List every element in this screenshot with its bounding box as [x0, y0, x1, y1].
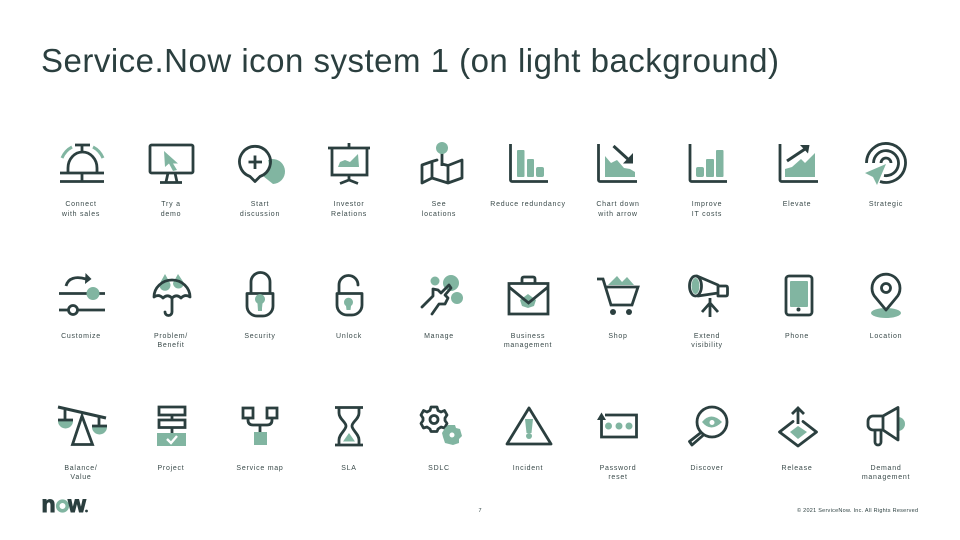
icon: password field: [597, 412, 636, 437]
icon: service map: [243, 408, 277, 445]
icon: megaphone: [868, 408, 905, 445]
icon: open padlock: [337, 276, 362, 315]
icon: telescope: [690, 276, 728, 317]
logo: now: w: [67, 491, 86, 517]
icon: hourglass: [335, 408, 363, 445]
label: Incident: Incident: [513, 465, 543, 472]
page number: 7: [478, 508, 482, 514]
icon: discussion bubbles: [239, 146, 285, 184]
label: Chart down with arrow: Chart down: [596, 201, 640, 208]
label: Release: Release: [782, 465, 812, 472]
label: Discover: Discover: [690, 465, 724, 472]
icon: service bell: [60, 145, 104, 182]
icon: project flow: [157, 407, 186, 446]
label: Shop: Shop: [608, 333, 628, 340]
icon: hand with circles: [422, 275, 463, 314]
icon: bars descending: [510, 144, 548, 182]
logo: now: [42, 491, 88, 517]
label: Connect with sales: with sales: [61, 211, 100, 218]
icon: balance scale: [58, 407, 107, 444]
label: Location: Location: [870, 333, 902, 340]
label: SDLC: SDLC: [428, 465, 450, 472]
icon: gears: [421, 407, 462, 445]
label: Reduce redundancy: Reduce redundancy: [490, 201, 566, 208]
icon: bars ascending: [690, 144, 727, 182]
label: Connect with sales: Connect: [65, 201, 97, 208]
label: Phone: Phone: [785, 333, 809, 340]
label: Service map: Service map: [236, 465, 284, 472]
label: Security: Security: [244, 333, 276, 340]
icon: target with arrow: [865, 143, 906, 185]
icon: umbrella: [154, 274, 190, 316]
icon: briefcase: [509, 277, 548, 314]
label: Start discussion: discussion: [240, 211, 280, 218]
label: Problem/Benefit: Benefit: [157, 342, 185, 349]
icon: warning triangle: [507, 408, 551, 444]
icon: phone: [786, 276, 812, 315]
label: Extend visibility: Extend: [694, 333, 720, 340]
copyright: © 2021 ServiceNow. Inc. All Rights Reserved: [797, 507, 918, 514]
label: Investor Relations: Relations: [331, 211, 367, 218]
label: Try a demo: demo: [161, 211, 181, 218]
label: Extend visibility: visibility: [691, 342, 723, 349]
icon: presentation board: [328, 143, 370, 184]
icon: area chart with up arrow: [780, 144, 818, 182]
icon: locked padlock: [247, 272, 273, 316]
label: SLA: SLA: [341, 465, 357, 472]
label: See locations: locations: [422, 211, 456, 218]
label: Demand management: Demand: [871, 465, 901, 472]
label: Strategic: Strategic: [869, 201, 903, 208]
icon: sliders: [59, 273, 105, 314]
label: Unlock: Unlock: [336, 333, 362, 340]
icon: map with pin: [422, 142, 462, 183]
label: Elevate: Elevate: [783, 201, 811, 208]
label: Password reset: Password: [600, 465, 636, 472]
icon: shopping cart: [597, 276, 638, 315]
label: Project: Project: [157, 465, 185, 472]
label: Improve IT costs: IT costs: [692, 211, 722, 218]
icon: release diamond: [780, 408, 816, 446]
label: Business management: Business: [511, 333, 545, 340]
label: Customize: Customize: [61, 333, 101, 340]
label: Problem/Benefit: Problem/: [154, 333, 188, 340]
label: Business management: management: [504, 342, 552, 349]
label: Investor Relations: Investor: [334, 201, 364, 208]
label: Chart down with arrow: with arrow: [597, 211, 638, 218]
icon: monitor with cursor: [150, 145, 193, 182]
label: Demand management: management: [862, 474, 910, 481]
label: Manage: Manage: [424, 333, 454, 340]
icon: location pin: [871, 274, 901, 318]
label: Balance/Value: Balance/: [64, 465, 98, 472]
label: Try a demo: Try a: [161, 201, 181, 208]
label: Password reset: reset: [608, 474, 628, 481]
icon: area chart with down arrow: [598, 144, 637, 182]
icon: magnifier with eye: [690, 407, 727, 445]
title: Service.Now icon system 1 (on light background): [41, 42, 779, 79]
label: Balance/Value: Value: [70, 474, 92, 481]
label: See locations: See: [432, 201, 446, 208]
label: Improve IT costs: Improve: [692, 201, 722, 208]
label: Start discussion: Start: [251, 201, 269, 208]
logo: now: n: [42, 491, 56, 517]
